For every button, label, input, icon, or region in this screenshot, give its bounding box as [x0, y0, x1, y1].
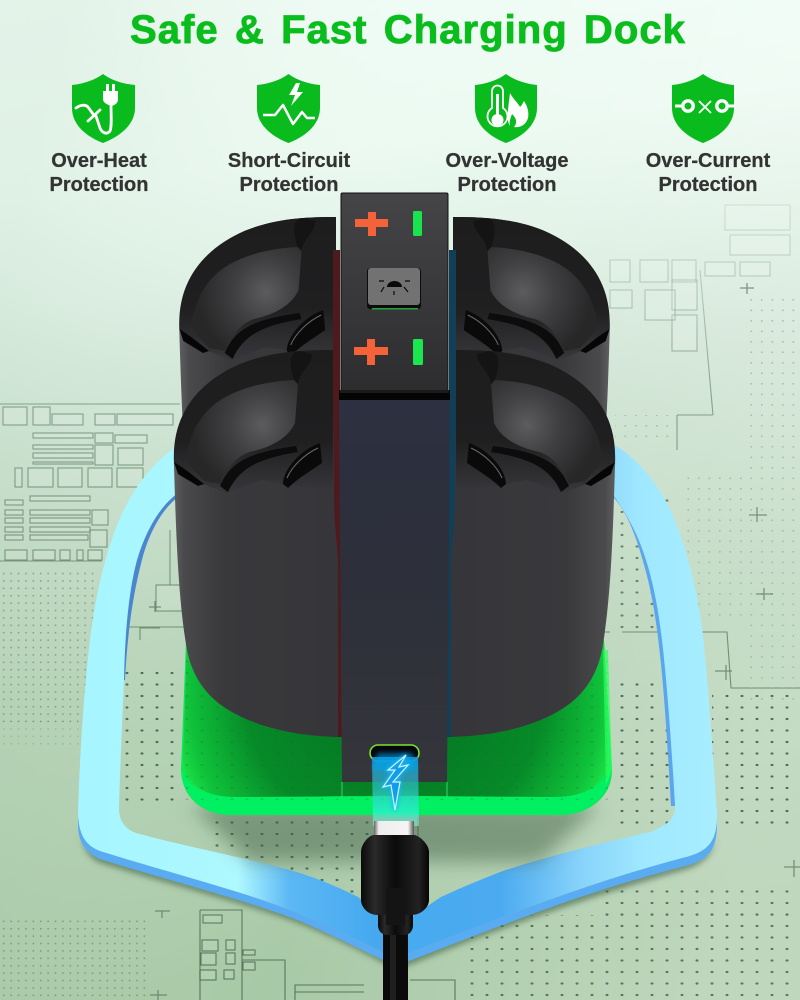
icon: shield with open circuit — [672, 74, 734, 143]
ring drop shadow — [80, 835, 717, 970]
green charging base — [181, 640, 612, 862]
label: Over-Heat — [51, 150, 147, 172]
icon: shield with plug — [72, 74, 135, 143]
light beam — [372, 757, 419, 826]
feature: over-voltage protection — [446, 74, 568, 196]
USB-C cable — [361, 821, 429, 1000]
feature: short-circuit protection: Protection — [240, 174, 338, 196]
green LED bottom — [413, 339, 423, 365]
front pair of joy-con controllers — [174, 350, 615, 737]
connector housing — [361, 835, 429, 915]
ring top face — [78, 420, 717, 958]
lightning bolt — [383, 755, 408, 810]
feature: over-current protection: Protection — [659, 174, 757, 196]
dot fields — [0, 572, 95, 722]
dock centre column — [339, 193, 450, 797]
ring side lip — [78, 810, 717, 966]
base shadow — [190, 805, 600, 862]
column top plate — [341, 193, 448, 392]
back pair of joy-con controllers — [179, 217, 610, 604]
circuit traces and pads — [0, 270, 800, 1000]
green LED top — [413, 211, 422, 236]
shield outline ring — [78, 420, 717, 970]
label: Short-Circuit — [228, 150, 350, 172]
light button — [367, 268, 421, 310]
orange plus indicator top — [355, 212, 388, 236]
ring inner dark lip — [120, 491, 177, 680]
feature: over-voltage protection: Protection — [458, 174, 556, 196]
label: Over-Current — [646, 150, 771, 172]
label: Over-Voltage — [446, 150, 568, 172]
metal plug — [374, 821, 414, 837]
feature: over-heat protection — [50, 74, 148, 196]
colour strips beside the column — [333, 250, 456, 737]
title: Safe & Fast Charging Dock — [130, 8, 686, 52]
feature: over-heat protection: Protection — [50, 174, 148, 196]
alignment crosses — [149, 283, 800, 1000]
orange plus indicator bottom — [354, 339, 388, 365]
icon: shield with thermometer and flame — [475, 74, 537, 143]
feature: short-circuit protection — [228, 74, 350, 196]
cable wire — [383, 915, 408, 1000]
icon: shield with pulse — [257, 74, 320, 143]
strain relief — [378, 885, 413, 935]
USB-C port with charging beam — [370, 745, 419, 826]
column base notch glow — [342, 782, 447, 797]
feature: over-current protection — [646, 74, 771, 196]
